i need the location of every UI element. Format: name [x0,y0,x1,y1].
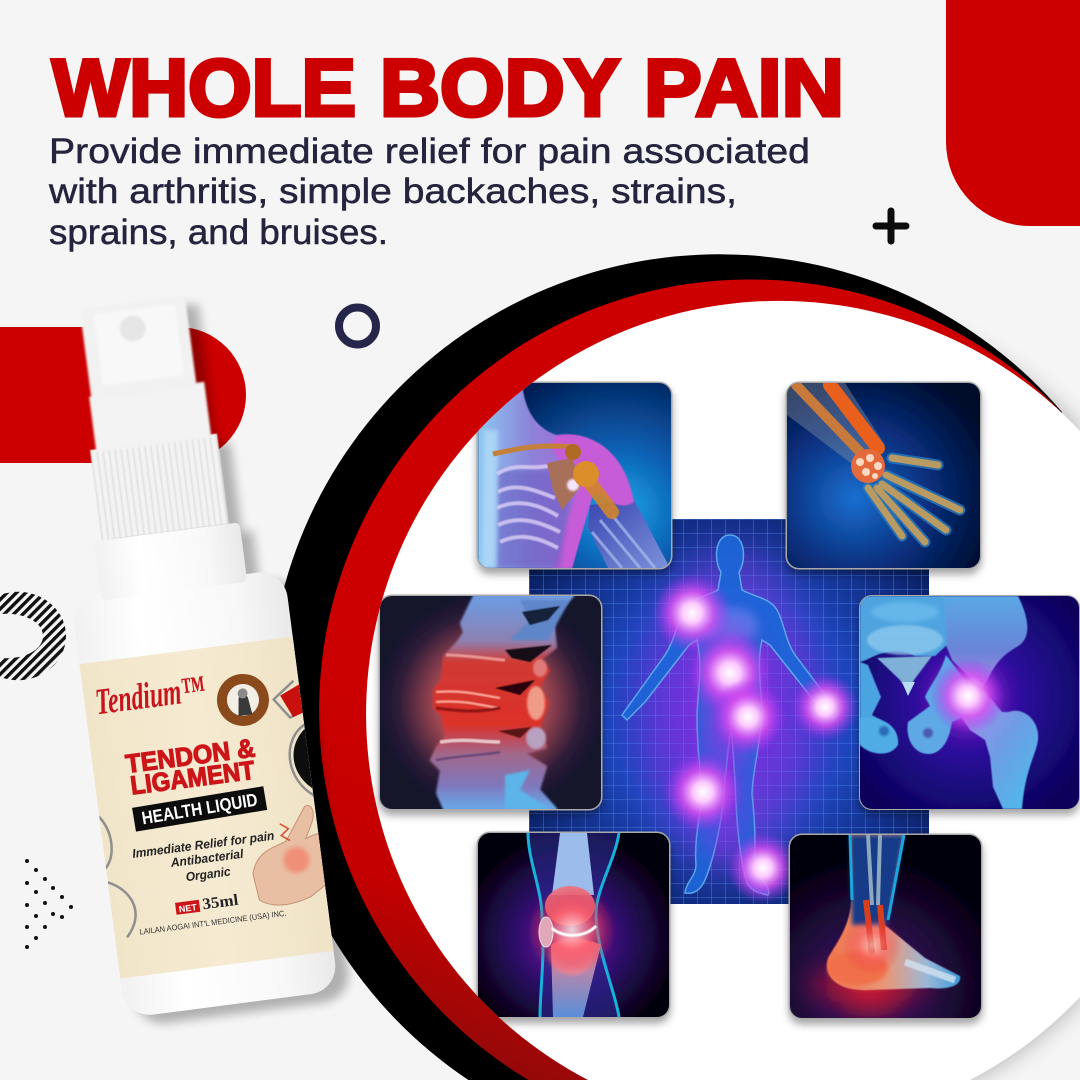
product name [124,739,256,795]
panel: foot [790,835,981,1018]
bottle shadow [47,296,352,1027]
label outlines [99,680,314,938]
body joints collage [380,383,1079,1018]
product name: LIGAMENT [129,755,257,801]
red crescent [319,279,1062,1080]
manufacturer line: LAILAN AOGAI INT'L MEDICINE (USA) INC. [139,909,287,937]
subtitle text [48,132,810,252]
icon: hand illustration [252,805,326,906]
title: BODY [380,44,620,134]
bottle body [71,569,339,1018]
panel: whole body figure [529,519,929,904]
title: WHOLE [52,44,356,134]
black crescent [268,254,1062,1080]
ribbed collar [90,434,229,540]
spray cap [78,295,211,452]
health liquid bar: HEALTH LIQUID [140,789,259,828]
volume badge: NET [178,902,198,914]
benefit lines: Immediate Relief for pain [131,829,275,861]
product name: TENDON & [124,732,257,779]
product: spray bottle [80,300,354,1028]
brand name: Tendium™ [93,668,207,723]
title: PAIN [644,44,844,134]
panel: shoulder [478,383,671,568]
decorative shape: top right red tab [946,0,1080,226]
panel: hand [787,383,980,568]
panel: hip [860,596,1079,809]
icon: striped ring [0,592,66,680]
subtitle text: with arthritis, simple backaches, strains, [48,172,737,211]
decorative shape: left red tab [0,327,246,463]
seal [216,674,269,726]
title [52,44,844,134]
icon: plus [876,211,906,241]
white circle [366,301,1080,1080]
panel: knee [478,833,669,1017]
product label [70,635,348,980]
volume badge: 35ml [201,892,240,913]
benefit lines: Organic [185,865,231,884]
icon: navy ring [339,308,376,344]
circle shadow [366,301,1080,1080]
benefit lines: Antibacterial [169,847,245,870]
subtitle text: Provide immediate relief for pain associated [49,132,810,171]
panel: spine [380,596,601,809]
subtitle text: sprains, and bruises. [49,213,388,252]
icon: dotted triangle [25,859,73,949]
bottle neck [94,522,247,601]
volume badge [175,894,238,915]
benefit lines [133,832,274,882]
